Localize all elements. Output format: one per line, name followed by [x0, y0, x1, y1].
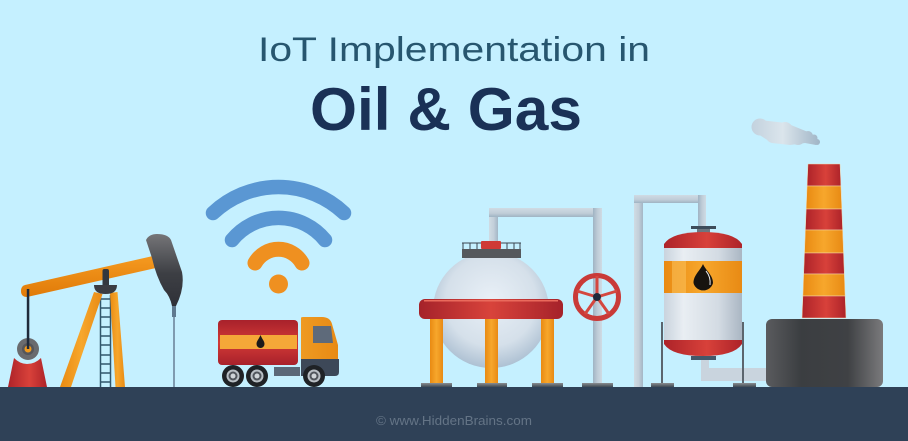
crank wheel: [17, 338, 39, 360]
base counterweight: [8, 358, 47, 387]
post: [102, 269, 109, 287]
piping to vessel: [634, 195, 706, 387]
left leg: [60, 292, 102, 387]
red cap: [481, 241, 501, 249]
pivot bearing: [94, 285, 117, 294]
connector: [274, 367, 300, 376]
right vessel leg: [742, 322, 744, 385]
smoke cloud: [752, 118, 820, 145]
ground strip: [0, 387, 908, 441]
front wheel: [303, 365, 325, 387]
orange band: [664, 261, 742, 293]
walking beam: [21, 256, 156, 297]
drop highlight: [706, 271, 710, 285]
polish rod: [172, 306, 176, 317]
vessel feet: [651, 383, 756, 387]
bottom flange: [691, 356, 716, 360]
icon: oil drop: [694, 264, 713, 290]
piping from sphere to valve: [489, 208, 602, 385]
lower pipe to chimney base: [701, 358, 768, 381]
ring highlight: [424, 300, 558, 302]
title line two: Oil & Gas: [310, 76, 582, 143]
left vessel leg: [661, 322, 663, 385]
right column: [541, 319, 554, 384]
top platform: [462, 249, 521, 258]
chimney base: [766, 319, 883, 387]
connecting rod: [27, 289, 29, 349]
tank band: [220, 335, 297, 349]
vessel body: [664, 248, 742, 340]
icon: wifi signal: [213, 187, 344, 294]
vertical pressure vessel: [651, 226, 756, 387]
valve wheel: [576, 276, 618, 318]
chassis: [301, 359, 339, 376]
footer credit: © www.HiddenBrains.com: [376, 414, 532, 428]
icon: oil drop on tank: [256, 335, 264, 348]
cab window: [313, 326, 333, 343]
tank: [218, 320, 298, 365]
tanker truck: [218, 317, 339, 387]
rear wheel one: [222, 365, 244, 387]
horse head: [146, 234, 183, 306]
red top dome: [664, 232, 742, 248]
chimney: [802, 164, 846, 318]
spherical storage tank: [419, 241, 613, 387]
cab: [301, 317, 338, 359]
left column: [430, 319, 443, 384]
ladder: [100, 295, 110, 387]
right leg: [110, 292, 125, 387]
rear wheel two: [246, 365, 268, 387]
sphere: [433, 252, 549, 368]
column feet: [421, 383, 613, 387]
title line one: IoT Implementation in: [258, 31, 650, 69]
railing: [462, 243, 521, 249]
band highlight: [672, 261, 686, 293]
red ring: [419, 299, 563, 319]
top flange: [691, 226, 716, 232]
center column: [485, 319, 498, 384]
pump jack: [8, 234, 183, 387]
red bottom dome: [664, 340, 742, 356]
